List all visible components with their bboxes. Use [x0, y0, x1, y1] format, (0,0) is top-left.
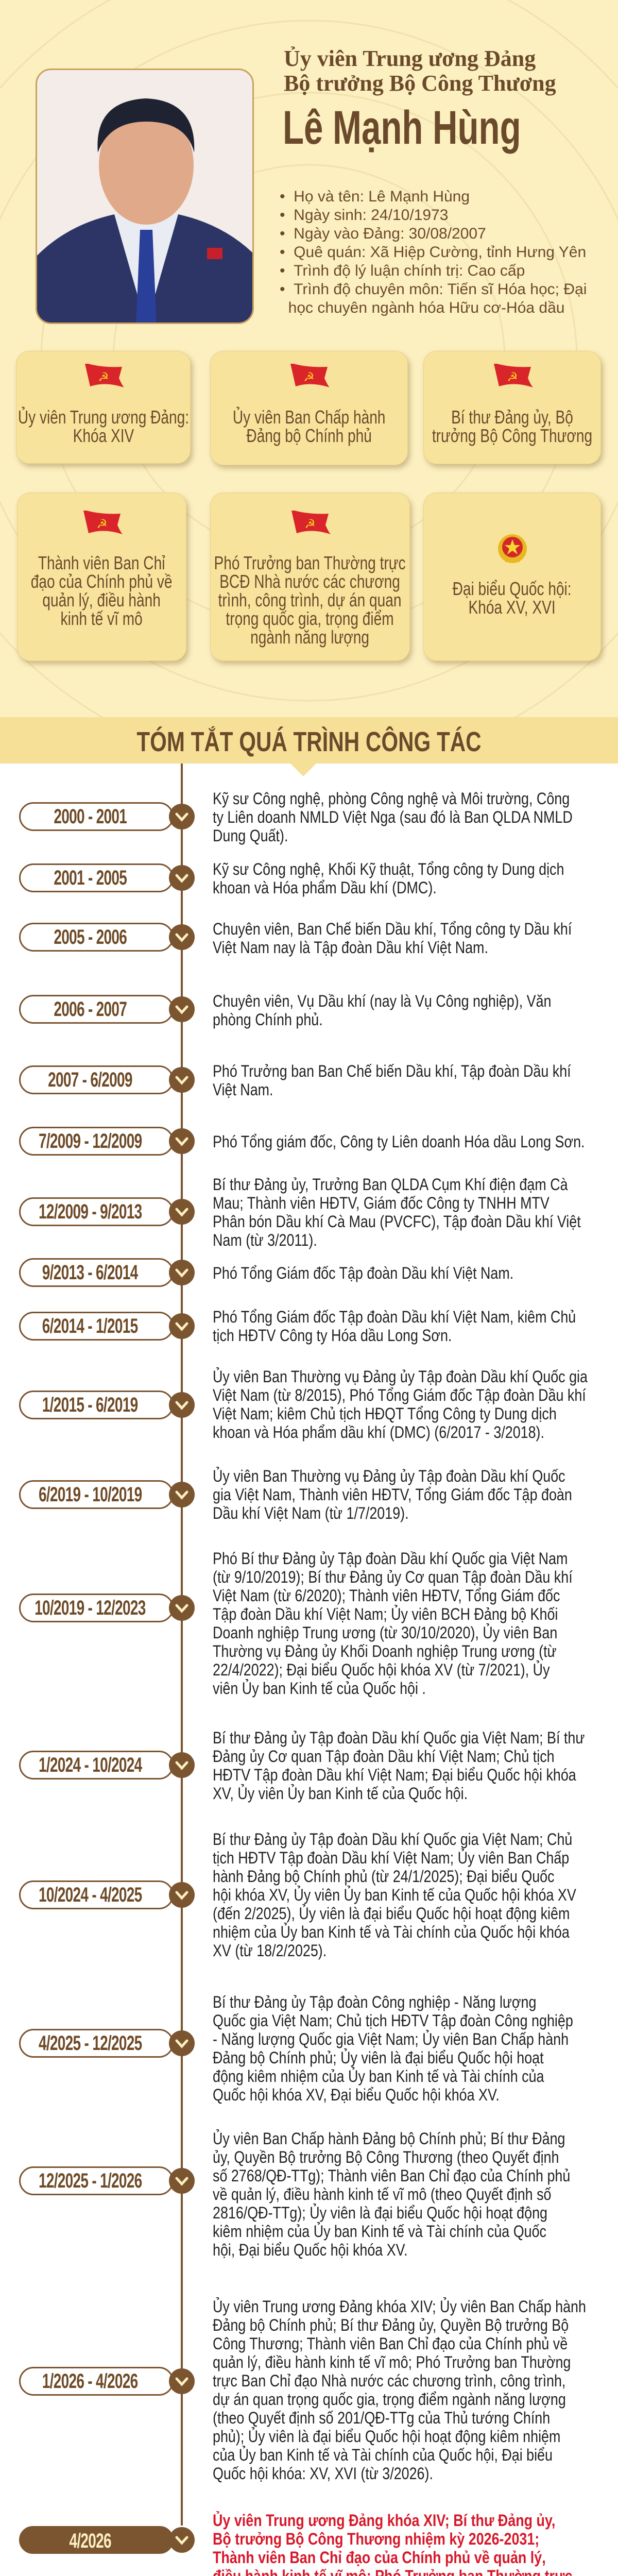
personal info: • Quê quán: Xã Hiệp Cường, tỉnh Hưng Yên [280, 244, 586, 261]
item 2000-2001 [19, 789, 573, 845]
text: nhiệm của Ủy ban Kinh tế và Tài chính của Quốc hội khóa [213, 1923, 570, 1941]
icon: party flag: ☭ [96, 517, 107, 531]
text: Bí thư Đảng ủy Tập đoàn Dầu khí Quốc gia Việt Nam; Chủ [213, 1830, 572, 1849]
item 1/2024-10/2024: HĐTV Tập đoàn Dầu khí Việt Nam; Đại biểu Quốc hội khóa [213, 1766, 576, 1784]
card 1: Khóa XIV [73, 425, 134, 446]
text: dự án quan trọng quốc gia, trọng điểm ngành năng lượng [213, 2390, 566, 2409]
item 1/2024-10/2024: 1/2024 - 10/2024 [39, 1754, 142, 1776]
personal info: • Ngày vào Đảng: 30/08/2007 [280, 225, 486, 242]
item 2005-2006: 2005 - 2006 [54, 926, 127, 948]
card 5: ngành năng lượng [251, 626, 369, 648]
item 2005-2006: Việt Nam nay là Tập đoàn Dầu khí Việt Nam. [213, 938, 488, 957]
text: Dung Quất). [213, 826, 288, 845]
item 10/2024-4/2025: hội khóa XV, Ủy viên Ủy ban Kinh tế của Quốc hội khóa XV [213, 1886, 576, 1904]
text: Dầu khí Việt Nam (từ 1/7/2019). [213, 1504, 409, 1522]
item 4/2026 current: 4/2026 [69, 2530, 111, 2552]
text: XV, Ủy viên Ủy ban Kinh tế của Quốc hội. [213, 1784, 468, 1803]
card 4: Thành viên Ban Chỉ [38, 552, 165, 573]
text: khoan và Hóa phẩm dầu khí (DMC) (6/2017 - 3/2018). [213, 1423, 544, 1442]
text: Ủy viên Ban Thường vụ Đảng ủy Tập đoàn Dầu khí Quốc gia [213, 1367, 588, 1386]
item 12/2025-1/2026 [19, 2129, 570, 2259]
card 2 [210, 351, 408, 465]
text: Ủy viên Trung ương Đảng khóa XIV; Bí thư Đảng ủy, [213, 2511, 555, 2530]
item 2005-2006: Chuyên viên, Ban Chế biến Dầu khí, Tổng công ty Dầu khí [213, 920, 572, 938]
card 5: BCĐ Nhà nước các chương [220, 571, 400, 592]
item 2001-2005: khoan và Hóa phẩm Dầu khí (DMC). [213, 878, 437, 897]
item 2007-6/2009: Phó Trưởng ban Ban Chế biến Dầu khí, Tập đoàn Dầu khí [213, 1062, 571, 1080]
icon: party flag: ☭ [304, 517, 316, 531]
personal info: • Họ và tên: Lê Mạnh Hùng [280, 188, 470, 205]
item 7/2009-12/2009 [19, 1127, 585, 1156]
text: Bí thư Đảng ủy Tập đoàn Công nghiệp - Năng lượng [213, 1993, 536, 2011]
card 5: trình, công trình, dự án quan [218, 589, 402, 611]
card 6: Đại biểu Quốc hội: [453, 578, 572, 599]
item 1/2026-4/2026 [19, 2297, 586, 2483]
text: Nam (từ 3/2011). [213, 1231, 317, 1249]
item 9/2013-6/2014: Phó Tổng Giám đốc Tập đoàn Dầu khí Việt Nam. [213, 1264, 513, 1282]
text: viên Ủy ban Kinh tế của Quốc hội . [213, 1679, 426, 1698]
text: phủ); Ủy viên là đại biểu Quốc hội hoạt động kiêm nhiệm [213, 2427, 560, 2446]
card 3: trưởng Bộ Công Thương [432, 425, 592, 446]
item 12/2025-1/2026: 12/2025 - 1/2026 [39, 2170, 142, 2192]
text: hành Đảng bộ Chính phủ (từ 24/1/2025); Đại biểu Quốc [213, 1867, 555, 1886]
section header band [0, 717, 618, 764]
card 1: Ủy viên Trung ương Đảng: [18, 406, 189, 428]
item 4/2025-12/2025: - Năng lượng Quốc gia Việt Nam; Ủy viên Ban Chấp hành [213, 2030, 569, 2048]
text: (đến 2/2025), Ủy viên là đại biểu Quốc hội hoạt động kiêm [213, 1904, 570, 1923]
item 10/2019-12/2023 [19, 1549, 573, 1698]
item 12/2025-1/2026: số 2768/QĐ-TTg); Thành viên Ban Chỉ đạo của Chính phủ [213, 2166, 570, 2185]
item 4/2025-12/2025 [19, 1993, 573, 2104]
text: 22/4/2022); Đại biểu Quốc hội khóa XV (từ 7/2021), Ủy [213, 1660, 550, 1679]
item 1/2024-10/2024: Đảng ủy Cơ quan Tập đoàn Dầu khí Việt Nam; Chủ tịch [213, 1747, 555, 1766]
item 10/2019-12/2023: Tập đoàn Dầu khí Việt Nam; Ủy viên BCH Đảng bộ Khối [213, 1605, 558, 1623]
item 6/2019-10/2019 [19, 1467, 572, 1522]
item 9/2013-6/2014 [19, 1258, 513, 1287]
card 2: Đảng bộ Chính phủ [246, 425, 372, 446]
item 2006-2007: 2006 - 2007 [54, 998, 127, 1021]
item 4/2026 current: Bộ trưởng Bộ Công Thương nhiệm kỳ 2026-2031; [213, 2530, 539, 2548]
text: hội, Đại biểu Quốc hội khóa XV. [213, 2241, 408, 2259]
item 10/2024-4/2025 [19, 1830, 576, 1960]
personal info [280, 188, 587, 316]
icon: party flag: ☭ [507, 370, 518, 384]
item 1/2015-6/2019: Việt Nam; kiêm Chủ tịch HĐQT Tổng Công ty Dung dịch [213, 1404, 557, 1423]
text: Doanh nghiệp Trung ương (từ 30/10/2020), Ủy viên Ban [213, 1623, 557, 1642]
item 6/2019-10/2019: gia Việt Nam, Thành viên HĐTV, Tổng Giám đốc Tập đoàn [213, 1485, 572, 1504]
section header band: TÓM TẮT QUÁ TRÌNH CÔNG TÁC [136, 726, 482, 757]
item 6/2014-1/2015: tịch HĐTV Công ty Hóa dầu Long Sơn. [213, 1326, 452, 1345]
item 4/2026 current [19, 2511, 572, 2576]
item 10/2024-4/2025: 10/2024 - 4/2025 [39, 1884, 142, 1906]
item 6/2014-1/2015: Phó Tổng Giám đốc Tập đoàn Dầu khí Việt Nam, kiêm Chủ [213, 1308, 576, 1326]
icon: party flag [85, 364, 124, 387]
text: Đảng bộ Chính phủ; Bí thư Đảng ủy, Quyền Bộ trưởng Bộ [213, 2316, 569, 2334]
card 6 [423, 493, 601, 661]
item 12/2025-1/2026: về quản lý, điều hành kinh tế vĩ mô (theo Quyết định số [213, 2185, 551, 2204]
text: ủy, Quyền Bộ trưởng Bộ Công Thương (theo Quyết định [213, 2148, 559, 2166]
title [284, 46, 556, 96]
item 1/2015-6/2019: 1/2015 - 6/2019 [42, 1394, 138, 1416]
item 1/2026-4/2026: 1/2026 - 4/2026 [42, 2370, 138, 2393]
item 2001-2005: Kỹ sư Công nghệ, Khối Kỹ thuật, Tổng công ty Dung dịch [213, 860, 564, 878]
item 12/2009-9/2013: 12/2009 - 9/2013 [39, 1200, 142, 1223]
item 2001-2005 [19, 860, 564, 897]
text: quản lý, điều hành kinh tế vĩ mô; Phó Trưởng ban Thường [213, 2353, 571, 2371]
text: Quốc hội khóa XV, Đại biểu Quốc hội khóa XV. [213, 2086, 500, 2104]
item 6/2019-10/2019: 6/2019 - 10/2019 [39, 1483, 142, 1506]
icon: party flag [494, 364, 533, 387]
item 10/2019-12/2023: 10/2019 - 12/2023 [35, 1597, 146, 1619]
item 6/2014-1/2015 [19, 1308, 576, 1345]
item 4/2025-12/2025: Đảng bộ Chính phủ; Ủy viên là đại biểu Quốc hội hoạt [213, 2048, 544, 2067]
text: Kỹ sư Công nghệ, phòng Công nghệ và Môi trường, Công [213, 789, 570, 808]
name: Lê Mạnh Hùng [283, 101, 521, 154]
item 2007-6/2009: Việt Nam. [213, 1080, 273, 1099]
text: của Ủy ban Kinh tế và Tài chính của Quốc hội, Đại biểu [213, 2446, 553, 2464]
card 5: trọng quốc gia, trọng điểm [226, 608, 394, 629]
item 2006-2007: Chuyên viên, Vụ Dầu khí (nay là Vụ Công nghiệp), Văn [213, 992, 551, 1010]
personal info: học chuyên ngành hóa Hữu cơ-Hóa dầu [288, 299, 564, 316]
text: Công Thương; Thành viên Ban Chỉ đạo của Chính phủ về [213, 2334, 568, 2353]
icon: party flag [83, 511, 123, 534]
item 12/2009-9/2013 [19, 1175, 581, 1249]
card 2: Ủy viên Ban Chấp hành [233, 406, 385, 428]
text: kiêm nhiệm của Ủy ban Kinh tế và Tài chính của Quốc [213, 2222, 546, 2241]
text: Bí thư Đảng ủy Tập đoàn Dầu khí Quốc gia Việt Nam; Bí thư [213, 1728, 585, 1747]
item 10/2019-12/2023: Việt Nam (từ 6/2020); Thành viên HĐTV, Tổng Giám đốc [213, 1586, 560, 1605]
card 4 [17, 493, 186, 661]
item 2006-2007: phòng Chính phủ. [213, 1010, 323, 1029]
item 2000-2001: ty Liên doanh NMLD Việt Nga (sau đó là Ban QLDA NMLD [213, 808, 573, 826]
card 4: kinh tế vĩ mô [61, 608, 143, 629]
text: Phó Bí thư Đảng ủy Tập đoàn Dầu khí Quốc gia Việt Nam [213, 1549, 568, 1568]
item 6/2014-1/2015: 6/2014 - 1/2015 [42, 1315, 138, 1337]
icon: party flag: ☭ [98, 370, 109, 384]
text: XV (từ 18/2/2025). [213, 1941, 327, 1960]
text: Thường vụ Đảng ủy Khối Doanh nghiệp Trung ương (từ [213, 1642, 557, 1660]
icon: party flag [290, 364, 330, 387]
item 2007-6/2009: 2007 - 6/2009 [48, 1069, 132, 1091]
item 1/2024-10/2024 [19, 1728, 585, 1803]
title: Ủy viên Trung ương Đảng [284, 46, 536, 71]
item 1/2015-6/2019: Việt Nam (từ 8/2015), Phó Tổng Giám đốc Tập đoàn Dầu khí [213, 1386, 586, 1404]
card 6: Khóa XV, XVI [469, 597, 556, 618]
photo [36, 69, 254, 324]
item 7/2009-12/2009: 7/2009 - 12/2009 [39, 1130, 142, 1153]
card 3: Bí thư Đảng ủy, Bộ [451, 406, 573, 428]
card 4: đạo của Chính phủ về [31, 571, 173, 592]
top background [0, 0, 618, 764]
item 9/2013-6/2014: 9/2013 - 6/2014 [42, 1261, 138, 1284]
text: Thành viên Ban Chỉ đạo của Chính phủ về quản lý, [213, 2548, 546, 2567]
text: tịch HĐTV Tập đoàn Dầu khí Việt Nam; Ủy viên Ban Chấp [213, 1849, 569, 1867]
text: Ủy viên Trung ương Đảng khóa XIV; Ủy viên Ban Chấp hành [213, 2297, 586, 2316]
item 1/2026-4/2026: trực Ban Chỉ đạo Nhà nước các chương trình, công trình, [213, 2371, 565, 2390]
card 4: quản lý, điều hành [43, 589, 161, 611]
item 2000-2001: 2000 - 2001 [54, 805, 127, 828]
item 2007-6/2009 [19, 1062, 571, 1099]
personal info: • Trình độ lý luận chính trị: Cao cấp [280, 262, 525, 279]
text: Quốc hội khóa: XV, XVI (từ 3/2026). [213, 2464, 433, 2483]
card 5: Phó Trưởng ban Thường trực [214, 552, 406, 573]
item 4/2025-12/2025: 4/2025 - 12/2025 [39, 2032, 142, 2055]
text: Bí thư Đảng ủy, Trưởng Ban QLDA Cụm Khí điện đạm Cà [213, 1175, 568, 1194]
text: Ủy viên Ban Thường vụ Đảng ủy Tập đoàn Dầu khí Quốc [213, 1467, 565, 1485]
icon: party flag [291, 511, 331, 534]
item 2005-2006 [19, 920, 572, 957]
card 1 [16, 351, 191, 464]
text: Quốc gia Việt Nam; Chủ tịch HĐTV Tập đoàn Công nghiệp [213, 2011, 573, 2030]
item 12/2009-9/2013: Mau; Thành viên HĐTV, Giám đốc Công ty TNHH MTV [213, 1194, 550, 1212]
personal info: • Trình độ chuyên môn: Tiến sĩ Hóa học; Đại [280, 281, 587, 298]
header pointer [290, 763, 317, 776]
text: động kiêm nhiệm của Ủy ban Kinh tế và Tài chính của [213, 2067, 544, 2086]
personal info: • Ngày sinh: 24/10/1973 [280, 207, 448, 224]
item 2001-2005: 2001 - 2005 [54, 867, 127, 889]
text: (theo Quyết định số 201/QĐ-TTg của Thủ tướng Chính [213, 2409, 550, 2427]
timeline line [181, 764, 183, 2526]
item 2006-2007 [19, 992, 551, 1029]
title: Bộ trưởng Bộ Công Thương [284, 71, 556, 96]
text: Ủy viên Ban Chấp hành Đảng bộ Chính phủ; Bí thư Đảng [213, 2129, 565, 2148]
item 1/2015-6/2019 [19, 1367, 588, 1442]
card 3 [423, 351, 601, 464]
text: 2816/QĐ-TTg); Ủy viên là đại biểu Quốc hội hoạt động [213, 2204, 547, 2222]
item 7/2009-12/2009: Phó Tổng giám đốc, Công ty Liên doanh Hóa dầu Long Sơn. [213, 1132, 585, 1151]
icon: party flag: ☭ [303, 370, 315, 384]
text: (từ 9/10/2019); Bí thư Đảng ủy Cơ quan Tập đoàn Dầu khí [213, 1568, 573, 1586]
icon: national emblem [498, 534, 527, 563]
item 12/2009-9/2013: Phân bón Dầu khí Cà Mau (PVCFC), Tập đoàn Dầu khí Việt [213, 1212, 581, 1231]
card 5 [210, 493, 410, 661]
